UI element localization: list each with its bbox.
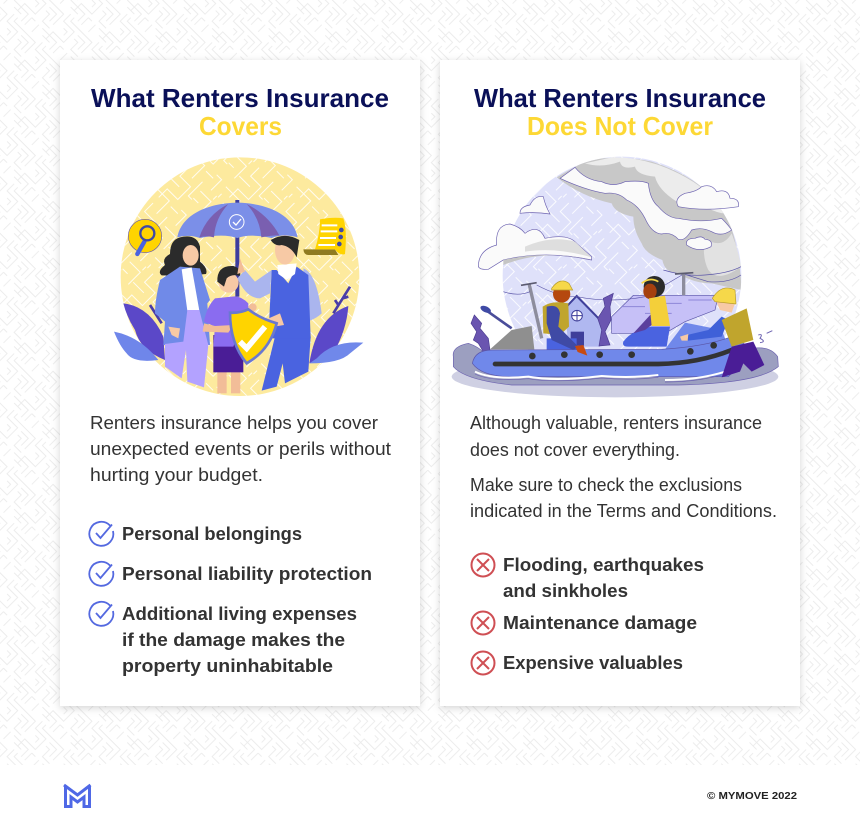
utility poles	[503, 273, 693, 338]
item: additional living expenses	[89, 602, 357, 676]
heading: covers: Covers	[199, 111, 282, 141]
item: personal liability: Personal liability protection	[122, 563, 372, 584]
item: additional living expenses: if the damage makes the	[122, 629, 345, 650]
motor	[479, 304, 534, 349]
small clouds	[478, 186, 739, 269]
item: flooding: and sinkholes	[503, 580, 628, 601]
windshield	[665, 323, 728, 349]
seaweed	[471, 293, 613, 352]
inflatable hull	[472, 337, 755, 382]
item: personal belongings: Personal belongings	[122, 523, 302, 544]
item: additional living expenses: Additional living expenses	[122, 603, 357, 624]
intro text	[90, 412, 391, 485]
heading: covers: What Renters Insurance	[91, 83, 389, 113]
description text: Although valuable, renters insurance	[470, 412, 762, 433]
rescuer right	[680, 288, 764, 377]
boy	[203, 266, 257, 393]
umbrella	[177, 200, 298, 297]
item: valuables: Expensive valuables	[503, 652, 683, 673]
intro text: Renters insurance helps you cover	[90, 412, 378, 433]
rescuer hand	[575, 345, 587, 356]
heading: does not cover	[474, 83, 766, 141]
heading: does not cover: What Renters Insurance	[474, 83, 766, 113]
panel: covers	[60, 60, 420, 706]
illustration: family under umbrella	[114, 157, 363, 396]
icon: magnifier	[128, 219, 162, 254]
intro text: hurting your budget.	[90, 464, 263, 485]
man	[237, 235, 322, 391]
item: additional living expenses: property uninhabitable	[122, 655, 333, 676]
item: maintenance: Maintenance damage	[503, 612, 697, 633]
heading: does not cover: Does Not Cover	[527, 111, 713, 141]
splash	[758, 331, 772, 343]
water and rear tube	[452, 343, 778, 397]
footer band	[0, 765, 860, 826]
woman	[155, 236, 210, 387]
MyMove logo	[64, 785, 90, 806]
rescued woman	[623, 276, 670, 347]
description text: Make sure to check the exclusions	[470, 474, 742, 495]
house and roof	[565, 295, 718, 347]
heading: covers	[91, 83, 389, 141]
description text: does not cover everything.	[470, 439, 680, 460]
panel: does not cover	[440, 60, 800, 706]
icon: document	[303, 218, 346, 255]
storm clouds	[557, 157, 742, 290]
illustration: flood rescue boat	[452, 157, 778, 397]
list: covered items	[89, 522, 372, 676]
intro text: unexpected events or perils without	[90, 438, 391, 459]
description text	[470, 412, 777, 521]
rescuer left	[543, 281, 578, 350]
copyright: © MYMOVE 2022	[707, 791, 797, 802]
shield	[230, 309, 277, 363]
item: flooding: Flooding, earthquakes	[503, 554, 704, 575]
description text: indicated in the Terms and Conditions.	[470, 500, 777, 521]
item: flooding	[472, 554, 704, 601]
list: excluded items	[472, 554, 704, 674]
